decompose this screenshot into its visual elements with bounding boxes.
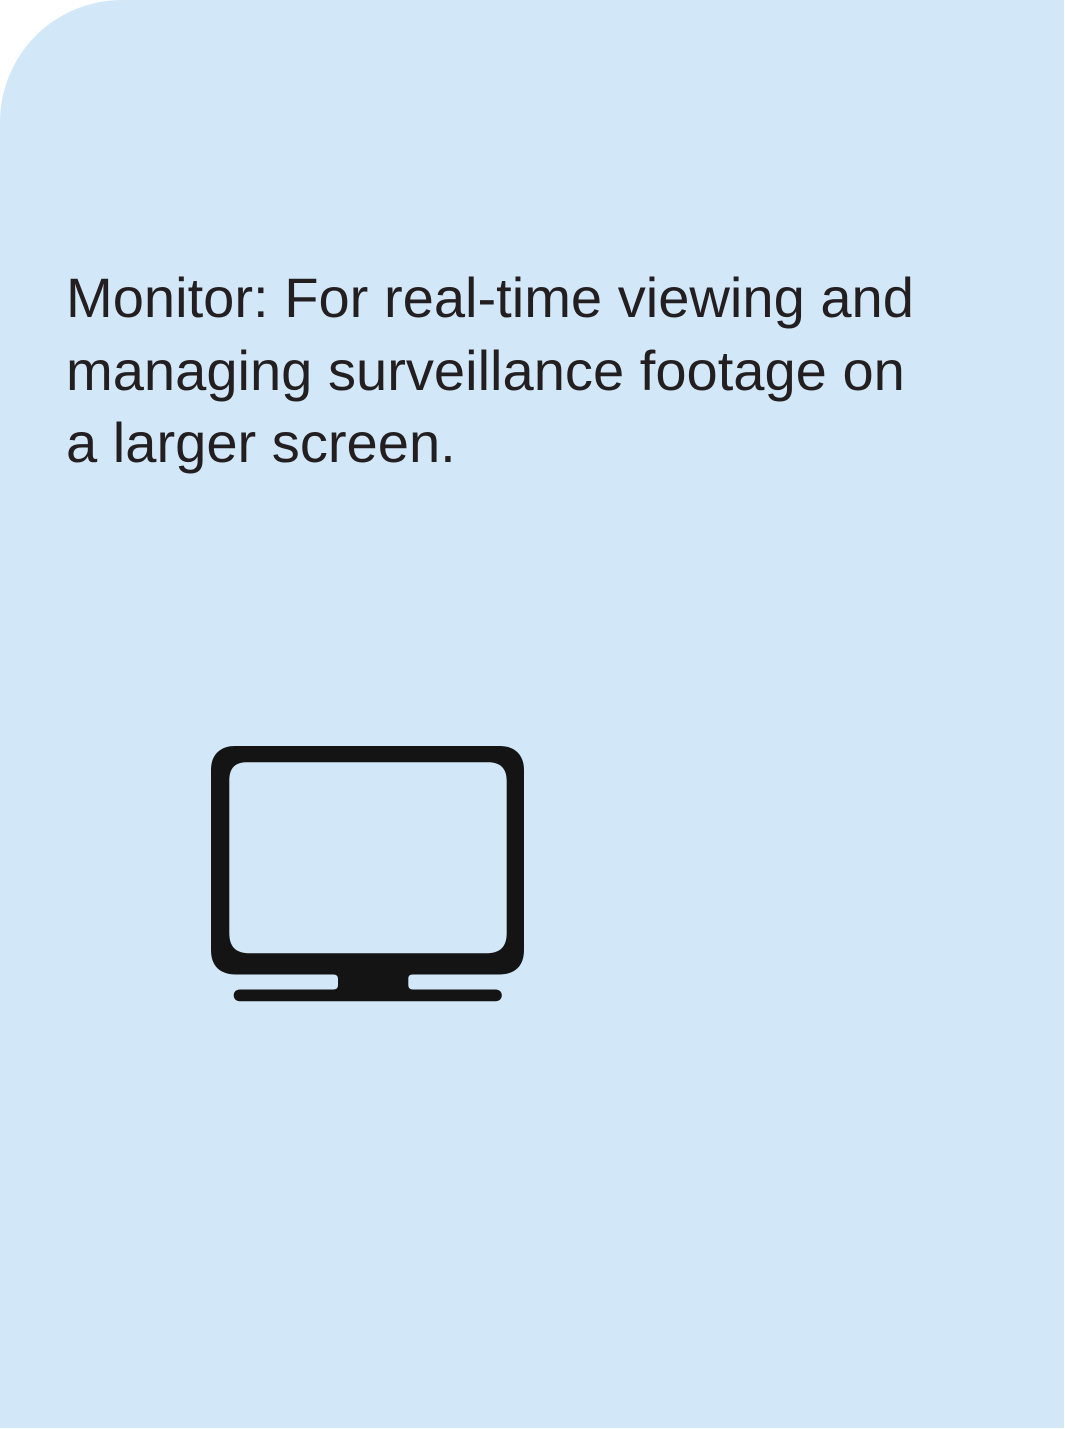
text block: monitor description: a larger screen. <box>66 411 456 474</box>
text block: monitor description: Monitor: For real-time viewing and <box>66 266 914 329</box>
icon: computer monitor <box>211 746 524 1002</box>
text block: monitor description: managing surveillance footage on <box>66 338 905 402</box>
text block: monitor description <box>66 266 914 474</box>
